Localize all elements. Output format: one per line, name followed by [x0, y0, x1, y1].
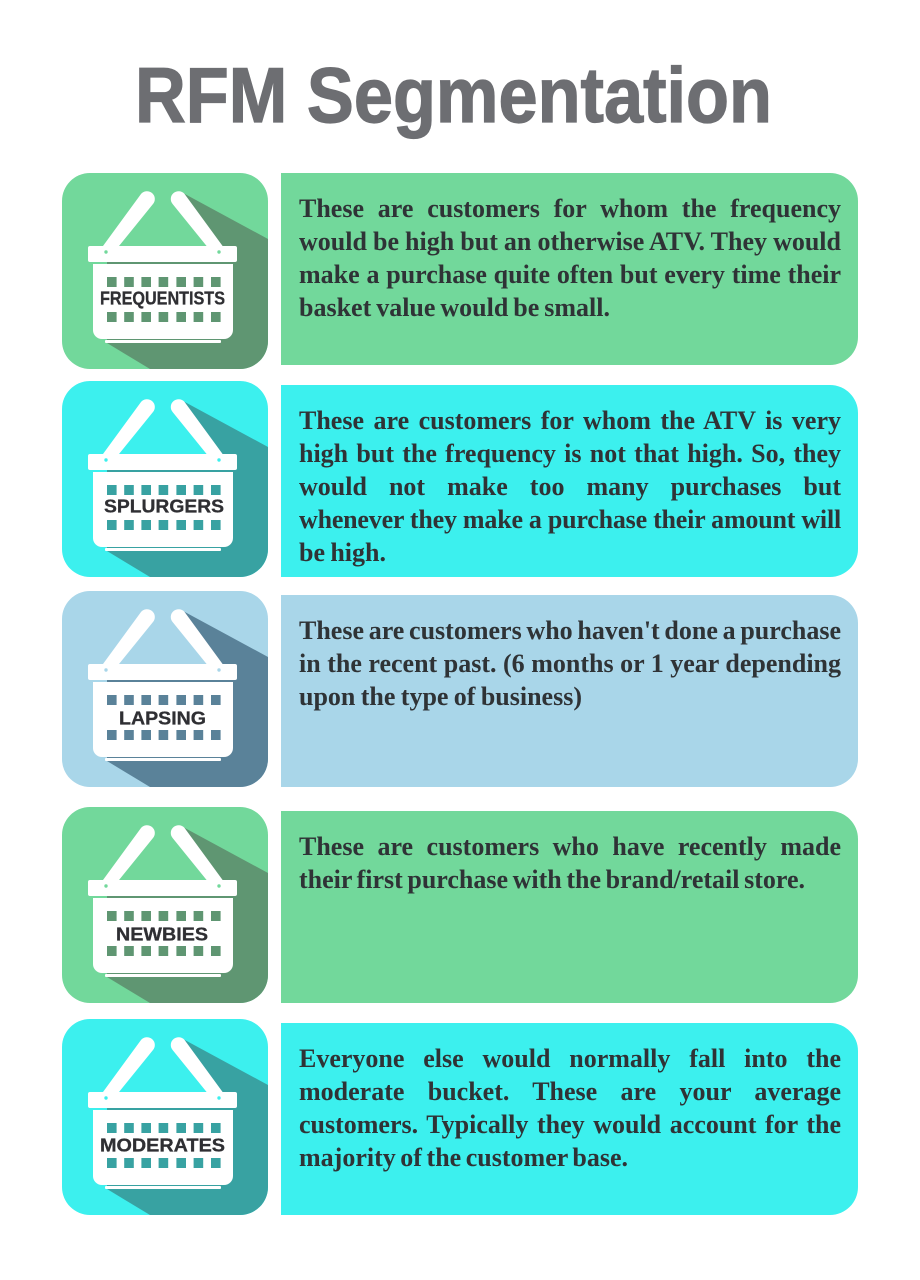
text: splurgers: These are customers for whom the ATV is very — [299, 406, 841, 435]
text: frequentists: These are customers for whom the frequency — [299, 194, 841, 223]
icon: frequentists basket — [62, 173, 268, 369]
title: RFM Segmentation — [135, 51, 772, 139]
icon: moderates basket: MODERATES — [100, 1136, 225, 1156]
text: moderates: majority of the customer base. — [299, 1143, 628, 1172]
text: lapsing — [299, 616, 841, 711]
text: frequentists: would be high but an otherwise ATV. They would — [299, 227, 841, 256]
text: moderates: customers. Typically they would account for the — [299, 1110, 841, 1139]
text: moderates — [299, 1044, 841, 1172]
text: moderates: Everyone else would normally fall into the — [299, 1044, 841, 1073]
panel: newbies description — [281, 811, 858, 1003]
text: splurgers: be high. — [299, 538, 386, 567]
text: splurgers — [299, 406, 841, 567]
icon: lapsing basket: LAPSING — [119, 708, 206, 728]
text: splurgers: high but the frequency is not that high. So, they — [299, 439, 841, 468]
panel: moderates description — [281, 1023, 858, 1215]
text: lapsing: upon the type of business) — [299, 682, 582, 711]
text: lapsing: These are customers who haven't done a purchase — [299, 616, 841, 645]
icon: newbies basket — [62, 807, 268, 1003]
text: newbies — [299, 832, 841, 894]
text: newbies: their first purchase with the brand/retail store. — [299, 865, 805, 894]
icon: lapsing basket — [62, 591, 268, 787]
icon: newbies basket: NEWBIES — [116, 924, 208, 944]
icon: moderates basket — [62, 1019, 268, 1215]
text: lapsing: in the recent past. (6 months or 1 year depending — [299, 649, 841, 678]
panel: lapsing description — [281, 595, 858, 787]
text: frequentists: basket value would be small. — [299, 293, 610, 322]
icon: splurgers basket — [62, 381, 268, 577]
panel: splurgers description — [281, 385, 858, 577]
text: splurgers: whenever they make a purchase their amount will — [299, 505, 841, 534]
icon: frequentists basket: FREQUENTISTS — [100, 288, 225, 308]
text: newbies: These are customers who have recently made — [299, 832, 841, 861]
text: moderates: moderate bucket. These are your average — [299, 1077, 841, 1106]
text: splurgers: would not make too many purchases but — [299, 472, 841, 501]
text: frequentists: make a purchase quite often but every time their — [299, 260, 841, 289]
icon: splurgers basket: SPLURGERS — [104, 496, 224, 516]
panel: frequentists description — [281, 173, 858, 365]
text: frequentists — [299, 194, 841, 322]
